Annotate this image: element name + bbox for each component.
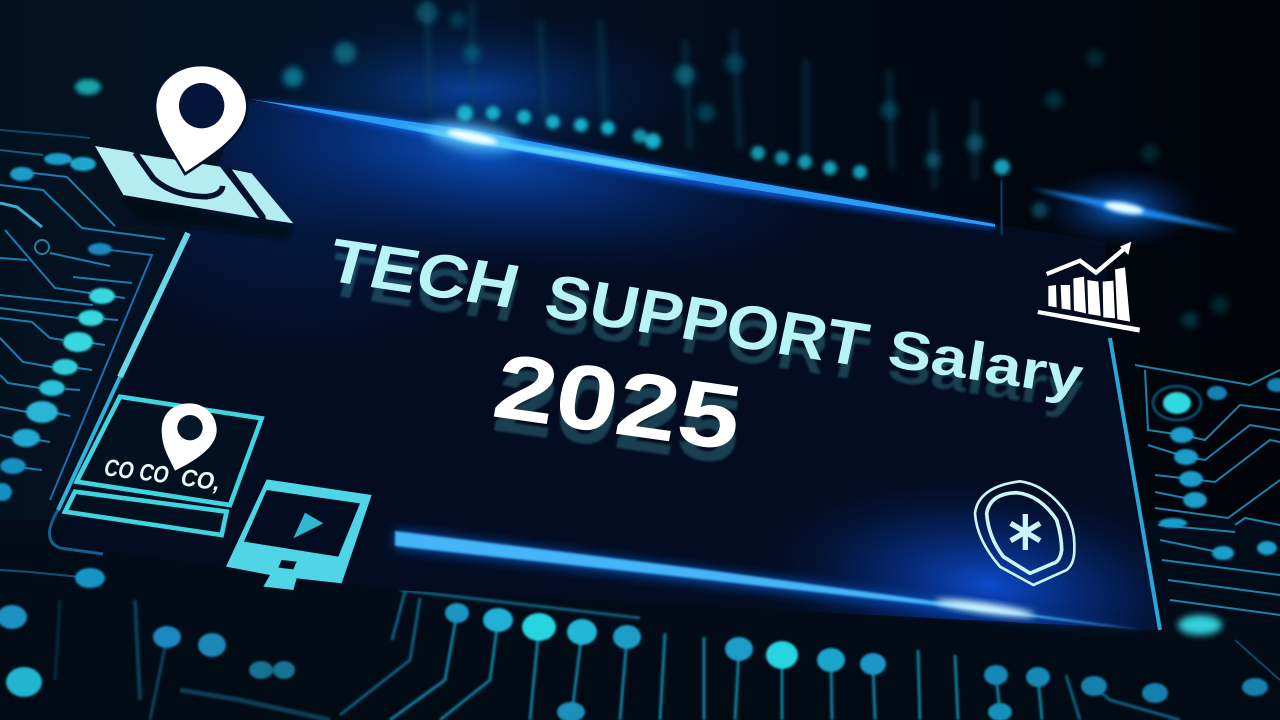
circuit traces: bottom [55, 590, 1180, 720]
glow line: bottom edge [395, 530, 1150, 632]
small location pin [162, 403, 217, 471]
glow flare: top right [1001, 166, 1240, 250]
screen labels: CO [102, 454, 136, 485]
screen labels [102, 454, 222, 496]
title reflection: TECH [320, 241, 527, 336]
title reflection: Salary [884, 333, 1087, 422]
circuit traces: right [1135, 365, 1280, 680]
title reflection: SUPPORT [539, 276, 875, 395]
title reflection [320, 241, 1087, 484]
circuit nodes: row above top edge [457, 105, 1010, 179]
glow line: top edge [250, 99, 995, 229]
icon: map with location pin [95, 65, 293, 240]
title: year: 2025 [487, 334, 749, 470]
circuit traces: left [0, 130, 165, 578]
screen labels: CO, [179, 464, 222, 496]
title: Tech Support Salary [320, 227, 1087, 408]
screen labels: CO [137, 459, 171, 489]
central panel [58, 100, 1160, 630]
glow line: left edge [49, 233, 188, 554]
faint vertical streaks [427, 0, 975, 190]
icon: screen with pin and labels [65, 397, 262, 535]
haze above top edge [240, 10, 700, 170]
circuit nodes: blurred distance [283, 2, 1229, 328]
icon: growth chart [1037, 242, 1140, 333]
panel glow: blue washes [60, 66, 1158, 630]
title reflection: 2025 [487, 348, 749, 484]
title: Tech Support Salary: TECH [320, 227, 527, 322]
title: Tech Support Salary: SUPPORT [539, 262, 875, 381]
title: Tech Support Salary: Salary [884, 319, 1087, 408]
icon: shield with star [975, 481, 1074, 585]
icon: monitor with play button [226, 479, 372, 590]
glow line: right edge [1110, 338, 1160, 630]
